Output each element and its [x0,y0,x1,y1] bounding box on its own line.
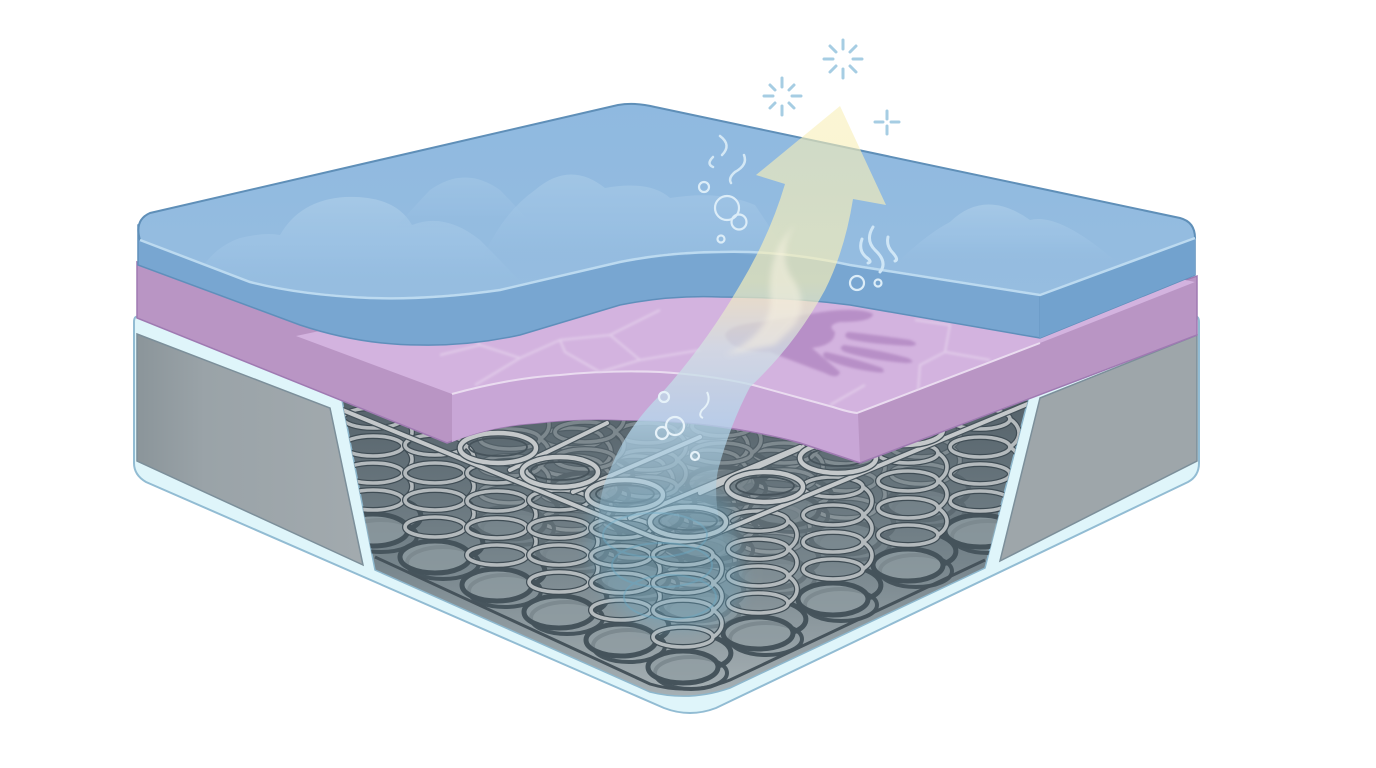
icon: bubbles lower [656,392,709,460]
panel: right gray side [1000,335,1197,561]
mattress cutaway illustration [133,38,1200,714]
pink foam side [137,262,1197,463]
panel: left gray side [137,334,363,565]
icon: bubbles upper [699,182,746,242]
icon: sparkle burst large [824,40,862,78]
swirl in springs [590,485,745,632]
springs [343,400,1028,691]
foam cell lines [440,310,990,405]
pink foam top surface [296,250,1195,413]
layer: pink foam [137,250,1197,463]
icon: hand imprint [725,310,916,376]
blue edge crease [1039,295,1041,338]
front spring rows [338,408,1028,689]
clouds on top surface [232,174,1076,242]
blue foam side [138,190,1195,345]
blue foam top surface [138,104,1195,298]
top ring coils [460,415,943,537]
rear springs [473,420,971,629]
icon: sparkle burst small [764,78,801,115]
pink front highlight [452,343,1040,413]
wisp inside arrow [725,225,801,355]
icon: bubbles near steam [850,276,882,290]
arrow: airflow rising [599,106,886,545]
panel: spring cavity floor [342,400,1028,696]
pink front face [452,371,860,462]
blue front highlight [140,238,1195,298]
frame: outer cyan border [134,317,1199,713]
layer: blue comfort foam [138,104,1195,345]
icon: steam wisps [861,227,897,272]
swirl rings [603,513,716,619]
base rail [375,557,985,689]
icon: squiggles upper [710,136,745,183]
icon: sparkle plus [875,111,899,134]
blue right section [1040,238,1195,338]
top wire frame [340,403,1030,542]
